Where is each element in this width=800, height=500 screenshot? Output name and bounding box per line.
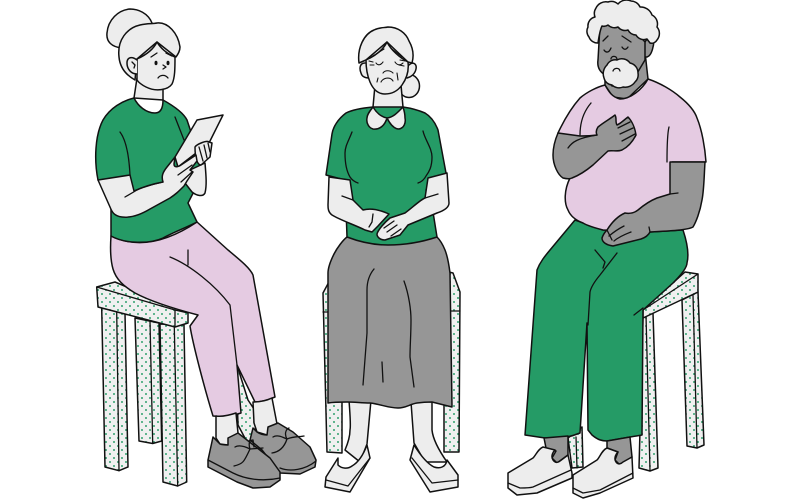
- shoe details and laces: [208, 428, 316, 480]
- shoe: right: [410, 445, 458, 492]
- trousers: knee fold lines: [588, 250, 643, 325]
- arm: left: [328, 177, 389, 232]
- back arm: [185, 163, 206, 196]
- t-shirt: pink: [558, 79, 706, 232]
- person: woman with hands clasped: [325, 27, 458, 492]
- t-shirt: bust fold lines: [345, 131, 432, 183]
- collar: [367, 107, 405, 129]
- front arm and hand: [98, 155, 197, 217]
- socks: [544, 436, 632, 465]
- t-shirt: green: [96, 98, 205, 242]
- hair: curly white: [587, 0, 659, 43]
- t-shirt: fold lines: [120, 117, 184, 175]
- arm: hand on chest: [553, 115, 636, 179]
- face features: [132, 53, 172, 78]
- hair: [119, 23, 180, 80]
- neck: [373, 85, 403, 118]
- skirt: fold lines: [363, 269, 414, 387]
- paper sheet: [175, 115, 223, 167]
- back hand finger lines: [199, 143, 210, 161]
- stool: right figure: [568, 272, 704, 471]
- legs: [345, 400, 447, 462]
- shoe: left: [508, 447, 572, 495]
- t-shirt: green: [326, 107, 446, 245]
- person: woman reading a paper: [96, 9, 316, 488]
- face features: [603, 36, 631, 71]
- hair: [359, 27, 413, 63]
- stool: left figure: [97, 282, 256, 486]
- neck: [605, 52, 648, 99]
- ears: [360, 63, 416, 78]
- socks: [216, 398, 277, 445]
- shoe: left: [325, 445, 370, 492]
- ear: [643, 39, 654, 57]
- person: man with hand on chest: [508, 0, 706, 498]
- trousers: pink: [111, 222, 275, 416]
- face: [366, 42, 408, 94]
- t-shirt: fold lines: [580, 103, 669, 162]
- front hand finger lines: [125, 165, 192, 197]
- shoe: right: [573, 448, 633, 498]
- shoe soles: [508, 470, 633, 493]
- beard: [603, 59, 638, 88]
- face: [598, 25, 645, 86]
- hand finger lines: [342, 194, 438, 236]
- arm: hand on lap: [602, 162, 705, 246]
- chest hand finger lines: [568, 122, 635, 148]
- stool: middle figure: [323, 270, 460, 453]
- face: [137, 42, 175, 90]
- skirt: grey: [328, 237, 452, 408]
- arm: right and hand: [377, 173, 449, 240]
- shoe: front: [208, 433, 280, 488]
- neck: [134, 78, 163, 100]
- hair bun: [107, 9, 152, 48]
- ear: [127, 58, 137, 74]
- hair bun: [398, 74, 420, 98]
- face features: [369, 49, 405, 82]
- hand lines: [607, 193, 678, 241]
- back hand: [195, 141, 212, 165]
- trousers: green: [525, 220, 688, 441]
- shoe: back: [250, 423, 316, 474]
- shoe soles: [326, 458, 458, 486]
- trousers: fold lines: [170, 250, 237, 365]
